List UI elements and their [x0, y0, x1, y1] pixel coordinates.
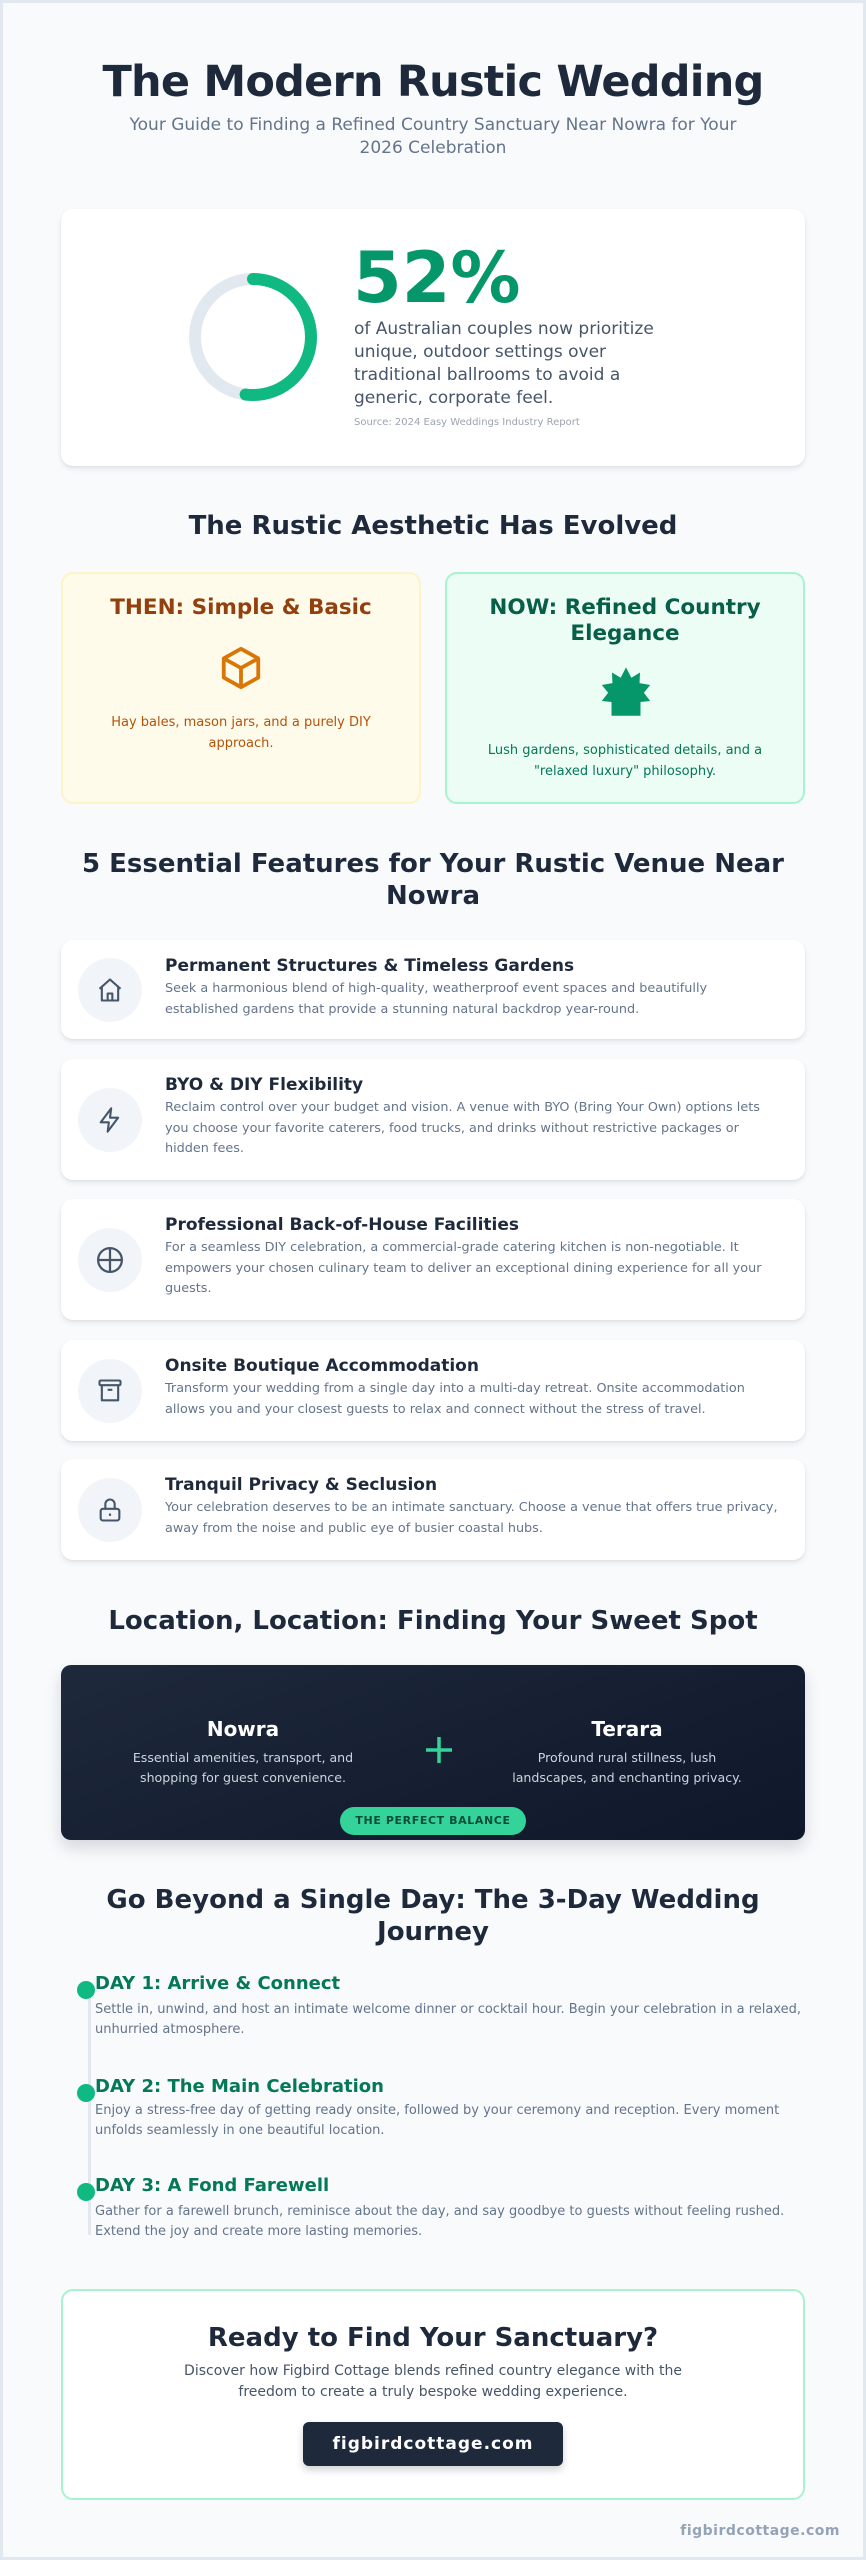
button: figbirdcottage.com [332, 2434, 534, 2454]
timeline [77, 1973, 801, 2239]
Terara: Profound rural stillness, lush landscapes, and enchanting privacy. [512, 1750, 742, 1785]
feature title: Professional Back-of-House Facilities [165, 1215, 519, 1235]
Nowra [133, 1717, 353, 1785]
day 3: Gather for a farewell brunch, reminisce about the day, and say goodbye to guests without feeling rushed. Extend the joy and create more lasting memories. [95, 2204, 784, 2239]
icon: archive [78, 1358, 142, 1422]
icon: house [78, 958, 142, 1022]
stat description: of Australian couples now prioritize unique, outdoor settings over traditional ballrooms to avoid a generic, corporate feel. [354, 319, 654, 408]
Terara [512, 1717, 742, 1785]
day 2: DAY 2: The Main Celebration [95, 2076, 384, 2097]
icon: plus [426, 1737, 452, 1763]
heading: features: 5 Essential Features for Your Rustic Venue Near Nowra [82, 849, 784, 911]
then heading: THEN: Simple & Basic [110, 595, 372, 620]
panel: then [61, 572, 421, 804]
feature text: Transform your wedding from a single day into a multi-day retreat. Onsite accommodation allows you and your closest guests to relax and connect without the stress of travel. [165, 1381, 745, 1416]
feature title: Tranquil Privacy & Seclusion [165, 1475, 437, 1495]
then description: Hay bales, mason jars, and a purely DIY approach. [111, 715, 371, 751]
subtitle: Your Guide to Finding a Refined Country Sanctuary Near Nowra for Your 2026 Celebration [130, 115, 736, 158]
feature text: Reclaim control over your budget and vision. A venue with BYO (Bring Your Own) options lets you choose your favorite caterers, food trucks, and drinks without restrictive packages or hidden fees. [165, 1100, 760, 1156]
day 2 [77, 2076, 779, 2138]
day 2: Enjoy a stress-free day of getting ready onsite, followed by your ceremony and reception. Every moment unfolds seamlessly in one beautiful location. [95, 2103, 779, 2138]
feature card 3 [61, 1199, 805, 1320]
day 1: Settle in, unwind, and host an intimate welcome dinner or cocktail hour. Begin your celebration in a relaxed, unhurried atmosphere. [95, 2002, 801, 2037]
Nowra: Nowra [207, 1717, 279, 1741]
panel: call to action [61, 2289, 805, 2500]
heading: rustic aesthetic: The Rustic Aesthetic Has Evolved [189, 511, 677, 541]
cta text: Discover how Figbird Cottage blends refined country elegance with the freedom to create a truly bespoke wedding experience. [184, 2363, 682, 2400]
source: Source: 2024 Easy Weddings Industry Report [354, 417, 580, 428]
feature title: Onsite Boutique Accommodation [165, 1356, 479, 1376]
icon: lightning [78, 1088, 142, 1152]
chart: donut 52% [189, 273, 317, 401]
panel: now [445, 572, 805, 804]
now heading: NOW: Refined Country Elegance [489, 595, 761, 646]
feature title: Permanent Structures & Timeless Gardens [165, 956, 574, 976]
feature text: Your celebration deserves to be an intimate sanctuary. Choose a venue that offers true privacy, away from the noise and public eye of busier coastal hubs. [165, 1500, 778, 1536]
icon: box [222, 646, 260, 690]
feature card 5 [61, 1459, 805, 1560]
heading: location: Location, Location: Finding Your Sweet Spot [108, 1606, 758, 1636]
cta heading: Ready to Find Your Sanctuary? [208, 2323, 658, 2353]
feature card 2 [61, 1059, 805, 1180]
day 1 [77, 1973, 801, 2037]
day 3 [77, 2175, 784, 2239]
button [303, 2422, 563, 2466]
day 3: DAY 3: A Fond Farewell [95, 2175, 329, 2196]
icon: lock [78, 1478, 142, 1542]
feature card 1 [61, 940, 805, 1039]
icon: circle cross [78, 1228, 142, 1292]
badge: THE PERFECT BALANCE [355, 1814, 511, 1827]
Nowra: Essential amenities, transport, and shopping for guest convenience. [133, 1750, 353, 1785]
heading: journey: Go Beyond a Single Day: The 3-Day Wedding Journey [106, 1885, 760, 1947]
big number: 52% [353, 237, 521, 319]
now description: Lush gardens, sophisticated details, and a "relaxed luxury" philosophy. [488, 743, 762, 779]
badge [340, 1807, 526, 1835]
feature card 4 [61, 1340, 805, 1441]
panel: statistic card [61, 209, 805, 466]
title: The Modern Rustic Wedding [103, 57, 763, 107]
panel: location balance [61, 1665, 805, 1840]
Terara: Terara [591, 1717, 663, 1741]
day 1: DAY 1: Arrive & Connect [95, 1973, 340, 1994]
feature title: BYO & DIY Flexibility [165, 1075, 363, 1095]
feature text: Seek a harmonious blend of high-quality, weatherproof event spaces and beautifully established gardens that provide a stunning natural backdrop year-round. [165, 981, 707, 1016]
feature text: For a seamless DIY celebration, a commercial-grade catering kitchen is non-negotiable. It empowers your chosen culinary team to deliver an exceptional dining experience for all your guests. [165, 1240, 761, 1296]
icon: leaf badge [602, 668, 650, 716]
footer url: figbirdcottage.com [680, 2523, 840, 2539]
